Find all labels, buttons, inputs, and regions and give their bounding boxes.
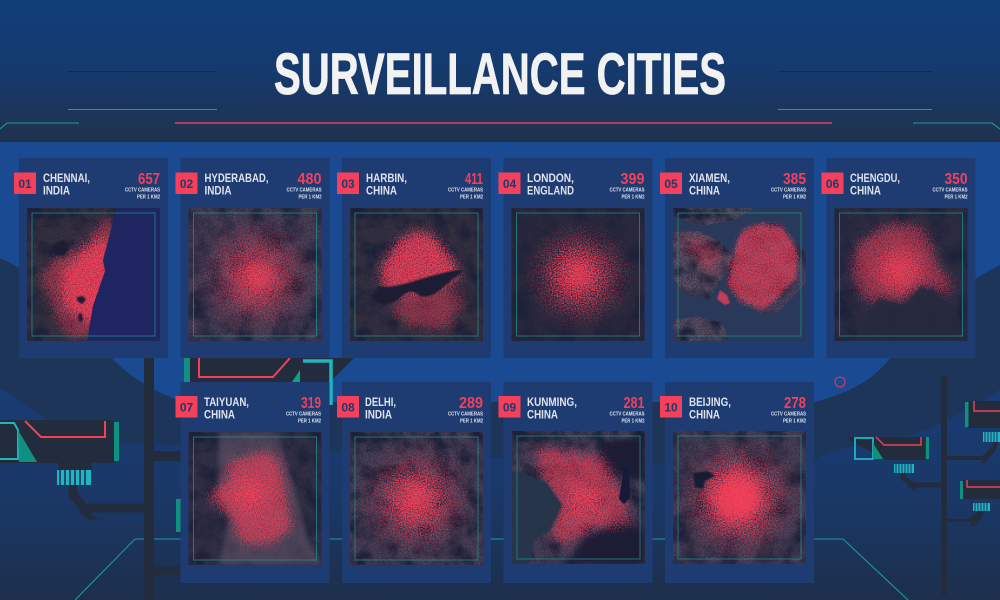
camera count: 399: [620, 171, 645, 188]
badge 05: 05: [664, 177, 678, 191]
camera count: PER 1 KM2: [137, 194, 160, 200]
camera count: PER 1 KM2: [460, 418, 483, 424]
city name: INDIA: [204, 184, 232, 198]
camera count: PER 1 KM2: [944, 194, 968, 200]
camera count: 350: [944, 171, 968, 188]
city name: CHINA: [527, 408, 558, 422]
badge 09: [498, 396, 520, 418]
camera count: CCTV CAMERAS: [286, 188, 322, 194]
badge 07: [176, 396, 198, 418]
icon: left camera: [0, 420, 180, 532]
camera count: PER 1 KM2: [460, 194, 483, 200]
floor line: [75, 539, 908, 600]
city name: [204, 395, 249, 422]
city name: INDIA: [365, 408, 392, 422]
badge 10: [660, 396, 682, 418]
badge 01: 01: [18, 177, 32, 191]
icon: center right camera: [845, 437, 943, 492]
map: Taiyuan: [188, 432, 322, 565]
right pole: [941, 376, 947, 596]
map: Kunming: [512, 431, 645, 564]
camera count: PER 1 KM2: [298, 194, 322, 200]
city name: [689, 171, 730, 198]
city name: [365, 395, 396, 422]
city name: XIAMEN,: [689, 171, 730, 185]
camera count: PER 1 KM2: [783, 194, 806, 200]
camera count: 480: [298, 171, 322, 188]
city name: [204, 171, 268, 198]
city name: CHINA: [689, 184, 720, 198]
city name: CHENGDU,: [850, 171, 900, 185]
badge 02: 02: [180, 177, 193, 191]
camera count: 385: [783, 171, 806, 188]
camera count: CCTV CAMERAS: [448, 412, 484, 418]
camera count: CCTV CAMERAS: [932, 188, 968, 194]
icon: lower right camera: [947, 480, 1000, 526]
panel: 06 Chengdu: [822, 158, 976, 358]
badge 07: 07: [180, 400, 193, 414]
camera count: CCTV CAMERAS: [771, 412, 807, 418]
panel: 01 Chennai: [14, 158, 168, 358]
city name: CHINA: [204, 408, 235, 422]
city name: LONDON,: [527, 171, 574, 185]
panel: 08 Delhi: [337, 382, 491, 583]
badge 10: 10: [664, 400, 678, 414]
camera count: 319: [301, 395, 321, 412]
icon: small circle: [835, 377, 845, 387]
camera count: CCTV CAMERAS: [610, 188, 645, 194]
camera count: 278: [784, 395, 806, 412]
city name: HYDERABAD,: [204, 171, 268, 185]
camera count: [448, 395, 484, 424]
map: Harbin: [350, 208, 483, 341]
city name: ENGLAND: [527, 184, 574, 198]
map: Chennai: [27, 208, 160, 341]
city name: [366, 171, 407, 198]
left pole: [144, 358, 184, 600]
panel: 03 Harbin: [337, 158, 491, 358]
camera count: [771, 395, 807, 424]
city name: HARBIN,: [366, 171, 407, 185]
camera count: [932, 171, 968, 200]
camera count: CCTV CAMERAS: [448, 188, 484, 194]
badge 01: [14, 172, 36, 194]
map: Chengdu: [834, 208, 968, 341]
city name: [850, 171, 900, 198]
camera count: PER 1 KM2: [298, 418, 321, 424]
header lines: [0, 72, 1000, 129]
map: Delhi: [350, 432, 483, 565]
badge 06: [822, 172, 844, 194]
panel: 10 Beijing: [660, 382, 814, 583]
camera count: [286, 395, 322, 424]
badge 03: [337, 172, 359, 194]
badge 08: [337, 396, 359, 418]
panel: 04 London: [498, 158, 652, 358]
city name: KUNMING,: [527, 395, 577, 409]
badge 02: [176, 172, 198, 194]
city name: CHENNAI,: [43, 171, 90, 185]
panel: 02 Hyderabad: [176, 158, 330, 358]
title: SURVEILLANCE CITIES: [274, 42, 726, 107]
map: Xiamen: [673, 208, 806, 341]
camera count: [610, 171, 645, 200]
city name: CHINA: [366, 184, 397, 198]
camera count: [448, 171, 484, 200]
camera count: 411: [465, 171, 483, 188]
camera count: 281: [624, 395, 645, 412]
badge 04: 04: [503, 177, 516, 191]
panel: 09 Kunming: [498, 382, 652, 583]
badge 03: 03: [341, 177, 355, 191]
city name: CHINA: [689, 408, 720, 422]
camera count: PER 1 KM2: [622, 194, 645, 200]
map: London: [512, 208, 644, 341]
camera count: CCTV CAMERAS: [286, 412, 322, 418]
camera count: CCTV CAMERAS: [771, 188, 807, 194]
camera count: 289: [459, 395, 483, 412]
city name: TAIYUAN,: [204, 395, 249, 409]
city name: DELHI,: [365, 395, 396, 409]
panel: 05 Xiamen: [660, 158, 814, 358]
city name: [43, 171, 90, 198]
city name: [527, 395, 577, 422]
map: Beijing: [669, 429, 809, 569]
badge 06: 06: [826, 177, 839, 191]
badge 04: [498, 172, 520, 194]
camera count: PER 1 KM2: [783, 418, 806, 424]
icon: top camera behind panels: [184, 358, 354, 405]
camera count: 657: [138, 171, 160, 188]
camera count: PER 1 KM2: [622, 418, 645, 424]
camera count: [771, 171, 807, 200]
map: Hyderabad: [188, 208, 322, 342]
icon: upper right camera: [947, 401, 1000, 463]
city name: [689, 395, 731, 422]
city name: [527, 171, 574, 198]
camera count: [610, 395, 645, 424]
camera count: [125, 171, 161, 200]
city name: INDIA: [43, 184, 70, 198]
city name: CHINA: [850, 184, 881, 198]
badge 09: 09: [503, 400, 516, 414]
badge 08: 08: [341, 400, 355, 414]
badge 05: [660, 172, 682, 194]
camera count: CCTV CAMERAS: [610, 412, 645, 418]
camera count: CCTV CAMERAS: [125, 188, 161, 194]
camera count: [286, 171, 322, 200]
city name: BEIJING,: [689, 395, 731, 409]
panel: 07 Taiyuan: [176, 382, 330, 583]
